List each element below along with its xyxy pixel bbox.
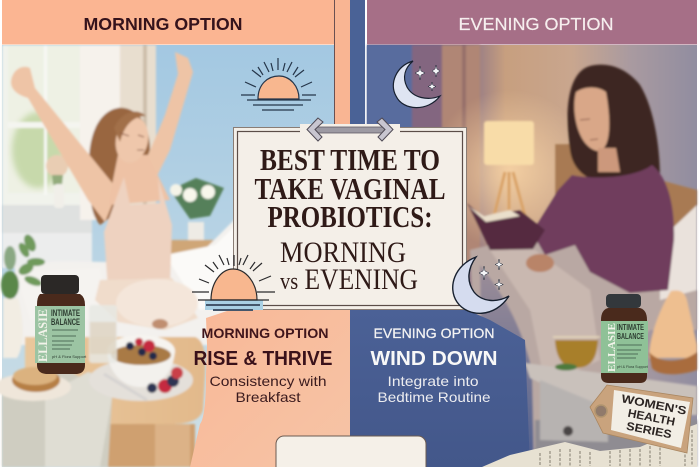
bottom card	[276, 436, 426, 467]
curtain	[80, 45, 120, 220]
bed	[15, 218, 236, 345]
icon: rising sun bottom	[192, 255, 275, 310]
torn newspaper	[482, 424, 697, 467]
neck and chest	[108, 155, 170, 205]
woman hair	[567, 65, 660, 186]
legs	[95, 278, 198, 330]
panel: evening text background	[350, 310, 530, 467]
diffuser	[649, 291, 697, 358]
nightstand	[535, 420, 697, 467]
divider line	[334, 0, 336, 127]
title text	[254, 142, 446, 296]
table	[25, 337, 205, 424]
header: morning option	[2, 0, 334, 44]
face	[112, 114, 152, 166]
header: morning option: MORNING OPTION	[84, 14, 242, 34]
product bottle: evening	[601, 294, 648, 383]
curtains	[367, 45, 412, 265]
tag: women's health series	[590, 385, 693, 453]
toast plate	[0, 373, 71, 401]
arms	[11, 67, 118, 222]
title text: PROBIOTICS:	[268, 199, 432, 234]
hand	[526, 254, 554, 272]
title card	[233, 118, 467, 310]
header: evening option: EVENING OPTION	[458, 14, 614, 34]
text block: morning: MORNING OPTION	[202, 325, 328, 341]
glass	[89, 305, 117, 363]
text block: evening: EVENING OPTION	[374, 325, 494, 341]
product bottle: morning	[35, 275, 87, 374]
title text: BEST TIME TO	[260, 142, 440, 177]
text block: evening: Integrate into	[388, 373, 479, 389]
product bottle: evening: BALANCE	[617, 331, 644, 341]
header: evening option	[367, 0, 697, 44]
product bottle: morning: BALANCE	[51, 317, 80, 328]
radiator	[2, 233, 92, 268]
woman: hair	[89, 108, 150, 225]
panel: evening photo	[367, 45, 697, 467]
tag: women's health series: HEALTH	[627, 408, 676, 429]
face	[574, 88, 609, 151]
vase & leaves	[3, 298, 23, 358]
text block: morning	[194, 325, 332, 405]
side table	[165, 240, 235, 256]
product bottle: evening: INTIMATE	[617, 322, 644, 332]
icon: rising sun top	[241, 58, 316, 110]
flowers on sill	[46, 155, 68, 177]
big plate & bowl	[89, 359, 193, 401]
product bottle: morning: pH & Flora Support	[52, 354, 87, 359]
title text: TAKE VAGINAL	[254, 171, 446, 206]
arrow: double headed	[300, 118, 400, 141]
headboard	[555, 144, 697, 255]
title text: MORNING	[280, 236, 406, 269]
book	[467, 203, 545, 250]
tag: women's health series: WOMEN'S	[620, 393, 688, 418]
text block: morning: Breakfast	[236, 389, 301, 405]
product bottle: morning: ELLASIE	[35, 309, 50, 362]
wall glow	[430, 90, 590, 250]
bed and pillow	[470, 205, 697, 467]
cup	[555, 340, 598, 368]
text block: evening	[370, 325, 498, 405]
text block: evening: WIND DOWN	[370, 348, 498, 370]
tag: women's health series: SERIES	[625, 421, 673, 441]
product bottle: evening: ELLASIE	[606, 323, 618, 372]
cloth	[2, 365, 112, 467]
plant	[188, 222, 204, 244]
text block: morning: Consistency with	[210, 373, 326, 389]
panel: morning photo	[0, 45, 334, 467]
window	[2, 45, 88, 220]
title text: vs EVENING	[280, 263, 418, 296]
lamp	[484, 121, 534, 165]
icon: moon top	[393, 61, 440, 108]
icon: moon bottom	[453, 257, 509, 313]
panel: morning text background	[190, 310, 350, 467]
top	[104, 177, 172, 290]
text block: morning: RISE & THRIVE	[194, 348, 332, 370]
sweater	[532, 165, 674, 293]
text block: evening: Bedtime Routine	[378, 389, 491, 405]
product bottle: evening: pH & Flora Support	[617, 365, 648, 369]
product bottle: morning: INTIMATE	[51, 308, 80, 319]
